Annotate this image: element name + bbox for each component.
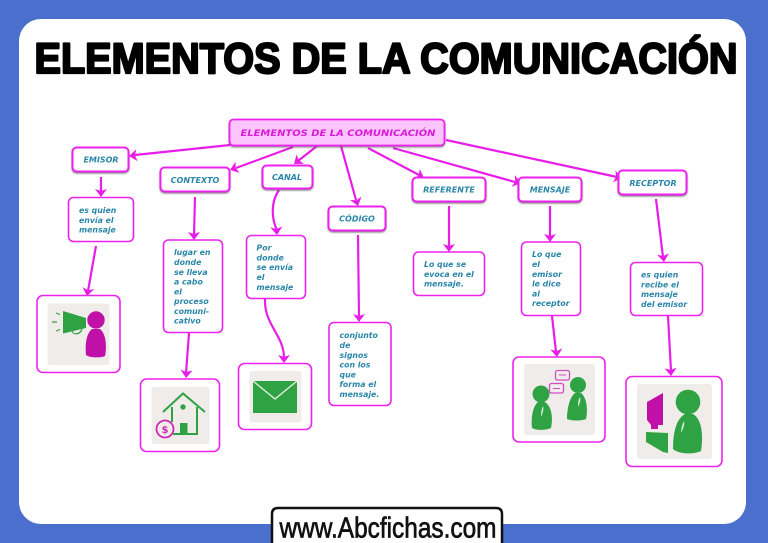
node: referente <box>412 178 486 202</box>
node: mensaje: MENSAJE <box>530 186 571 194</box>
description: mensaje <box>522 242 580 316</box>
node: mensaje <box>518 178 582 202</box>
description: canal: el <box>256 273 265 282</box>
description: contexto <box>164 240 222 332</box>
description: referente <box>414 252 484 296</box>
description: codigo: de <box>340 341 350 350</box>
description: receptor <box>630 262 702 316</box>
description: mensaje: receptor <box>532 299 571 308</box>
arrows: elements to descriptions and icons <box>81 177 677 378</box>
node: codigo <box>328 206 386 230</box>
description: codigo: forma el <box>340 380 376 389</box>
description: codigo: que <box>340 370 356 379</box>
node: receptor <box>618 170 686 194</box>
description: mensaje: emisor <box>532 270 563 279</box>
node: contexto <box>160 168 230 192</box>
description: mensaje: le dice <box>532 280 561 288</box>
root node <box>230 120 444 146</box>
description: canal: donde <box>256 253 284 262</box>
description: codigo: mensaje. <box>340 390 379 399</box>
description: codigo <box>329 322 391 406</box>
description: referente: mensaje. <box>424 280 464 288</box>
description: contexto: a cabo <box>174 278 203 286</box>
description: contexto: el <box>174 287 182 296</box>
icon card: house with dollar: $ <box>162 425 169 436</box>
description: emisor: es quien <box>79 206 117 215</box>
description: referente: evoca en el <box>424 270 474 279</box>
description: codigo: con los <box>340 360 371 370</box>
node: codigo: CÓDIGO <box>339 212 375 224</box>
description: canal: se envía <box>256 263 293 272</box>
description: contexto: cativo <box>174 316 201 326</box>
icon card: receiver at computer <box>626 376 722 466</box>
description: contexto: proceso <box>173 297 209 306</box>
root node: ELEMENTOS DE LA COMUNICACIÓN <box>240 127 436 139</box>
description: receptor: es quien <box>641 270 679 280</box>
description: emisor <box>68 198 134 242</box>
description: codigo: signos <box>340 351 368 360</box>
description: canal: mensaje <box>256 283 293 292</box>
description: mensaje: el <box>532 260 540 269</box>
description: emisor: mensaje <box>79 226 116 234</box>
description: emisor: envía el <box>79 216 114 225</box>
node: canal: CANAL <box>272 173 302 182</box>
description: contexto: se lleva <box>174 268 208 277</box>
icon card: speaker with megaphone <box>37 296 120 372</box>
description: mensaje: al <box>532 289 540 298</box>
description: codigo: conjunto <box>340 331 379 340</box>
node: referente: REFERENTE <box>423 186 475 194</box>
icon card: two people talking <box>513 357 605 442</box>
description: receptor: mensaje <box>641 290 678 299</box>
description: mensaje: Lo que <box>532 250 561 259</box>
description: receptor: recibe el <box>641 280 679 289</box>
description: canal: Por <box>256 244 273 252</box>
description: canal <box>246 236 306 298</box>
node: receptor: RECEPTOR <box>629 179 677 188</box>
node: emisor: EMISOR <box>83 156 119 164</box>
icon card: house with dollar <box>140 379 220 452</box>
description: receptor: del emisor <box>641 300 688 309</box>
arrows: root to elements <box>128 140 623 208</box>
description: referente: Lo que se <box>424 260 466 269</box>
node: emisor <box>72 148 128 172</box>
description: contexto: comuni- <box>174 307 209 316</box>
icon card: envelope <box>238 364 312 430</box>
description: contexto: lugar en <box>174 248 211 257</box>
node: canal <box>262 166 312 188</box>
node: contexto: CONTEXTO <box>171 176 220 185</box>
description: contexto: donde <box>174 258 201 267</box>
